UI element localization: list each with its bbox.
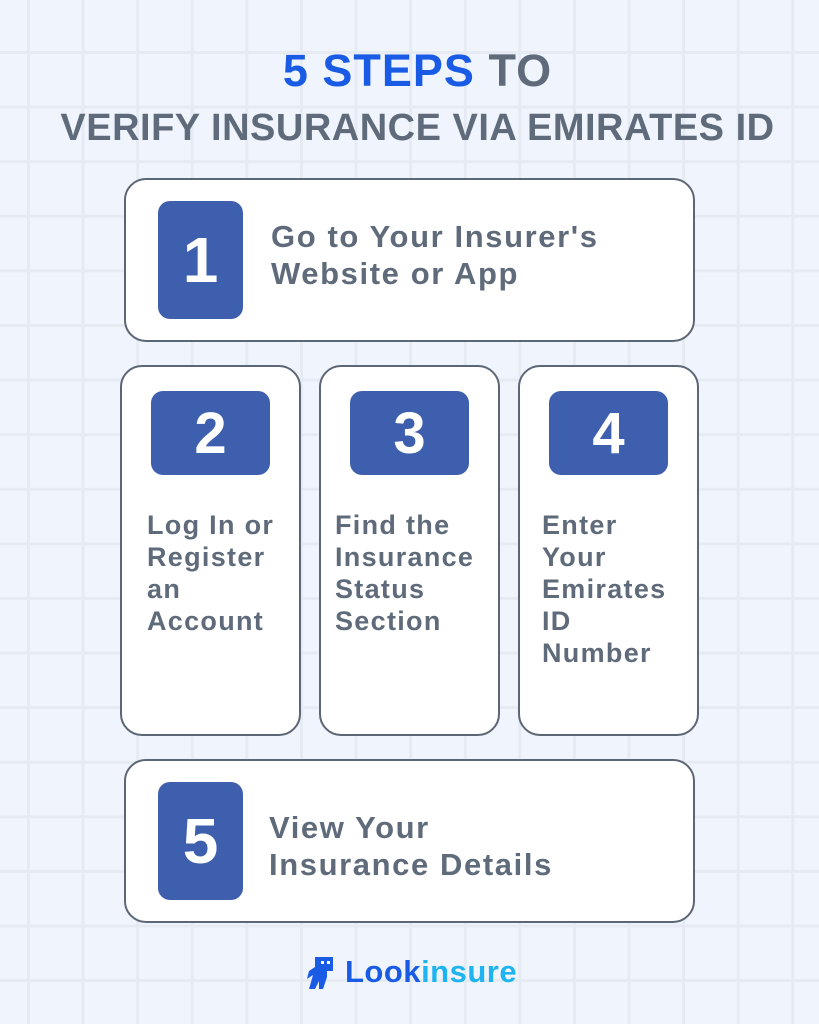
step 4 text: Emirates [542,574,666,604]
number 2: 2 [194,400,227,466]
step 1 text [271,219,599,291]
step 4 text [542,510,666,668]
panel: step 4 [518,365,699,736]
step 5 text [269,810,553,882]
number 4 [549,391,668,475]
panel: step 3 [319,365,500,736]
step 5 text: View Your [269,810,430,845]
logo: Lookinsure [345,954,517,989]
panel: step 1 [124,178,695,342]
step 4 text: ID [542,606,572,636]
step 2 text: an [147,574,181,604]
step 2 text [147,510,274,636]
number 4: 4 [592,400,625,466]
number 3 [350,391,469,475]
number 5 [158,782,243,900]
step 3 text: Status [335,574,425,604]
panel: step 5 [124,759,695,923]
step 4 text: Enter [542,510,618,540]
step 3 text: Find the [335,510,450,540]
step 3 text: Insurance [335,542,474,572]
number 1: 1 [183,224,218,296]
step 3 text: Section [335,606,442,636]
step 2 text: Register [147,542,265,572]
number 3: 3 [393,400,426,466]
number 2 [151,391,270,475]
step 1 text: Website or App [271,256,519,291]
step 3 text [335,510,474,636]
icon: mascot [307,957,333,989]
title: VERIFY INSURANCE VIA EMIRATES ID [60,107,775,149]
step 5 text: Insurance Details [269,847,553,882]
step 1 text: Go to Your Insurer's [271,219,599,254]
step 2 text: Log In or [147,510,274,540]
step 4 text: Number [542,638,652,668]
step 2 text: Account [147,606,264,636]
panel: step 2 [120,365,301,736]
step 4 text: Your [542,542,607,572]
number 1 [158,201,243,319]
title: 5 STEPS TO [283,45,552,96]
number 5: 5 [183,805,218,877]
title [60,45,775,149]
